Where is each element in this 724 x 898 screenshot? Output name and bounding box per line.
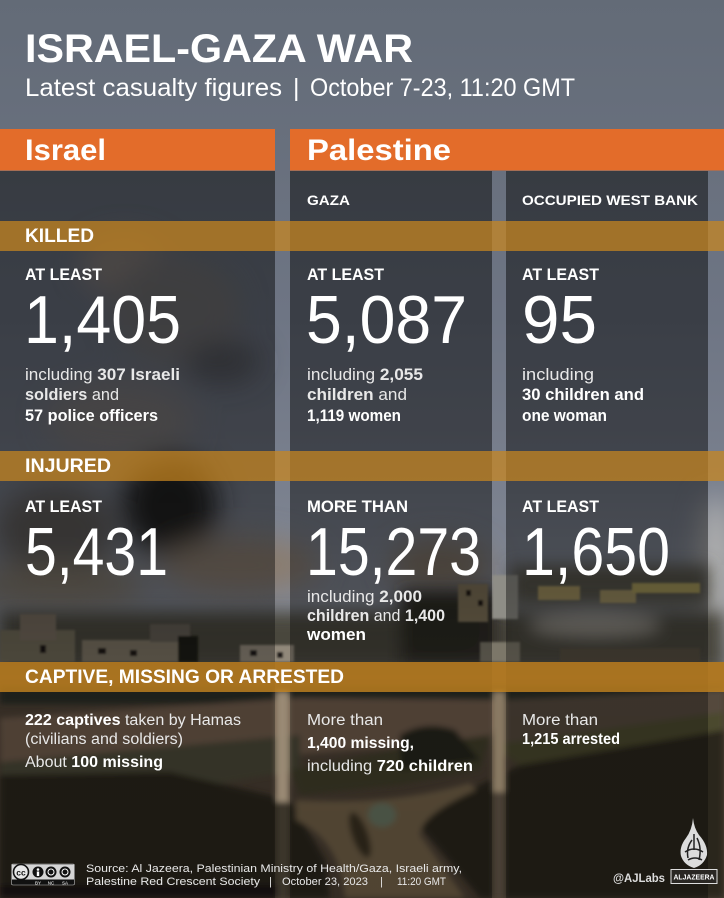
stat: Gaza injured: 15,273 [306, 514, 481, 590]
arrested: West Bank: More than [522, 712, 598, 729]
missing: Gaza: 1,400 missing, [307, 735, 414, 752]
stat: Gaza injured [306, 498, 481, 644]
icon: Creative Commons badge: BY [35, 880, 41, 886]
band: Captive, missing or arrested: CAPTIVE, MISSING OR ARRESTED [25, 667, 344, 688]
stat: Gaza injured: including 2,000 [307, 588, 422, 606]
subtitle: October 7-23, 11:20 GMT [310, 74, 575, 102]
title: ISRAEL-GAZA WAR [25, 27, 413, 71]
dark hill right [410, 730, 724, 898]
source text: 11:20 GMT [397, 876, 446, 888]
stat: Gaza injured: MORE THAN [307, 498, 408, 516]
stat: Israel killed [24, 266, 181, 425]
stat: West Bank injured: 1,650 [522, 514, 670, 590]
band: Injured [0, 451, 724, 481]
icon: Creative Commons badge: cc [16, 868, 26, 878]
missing: Gaza [307, 712, 473, 775]
subtitle: | [293, 74, 300, 102]
subtitle [25, 74, 575, 102]
icon: Creative Commons badge [12, 864, 74, 886]
band: Killed [0, 221, 724, 251]
source text: | [269, 876, 272, 888]
stat: West Bank killed: 30 children and [522, 386, 644, 404]
source text: | [380, 876, 383, 888]
logo: Al Jazeera wordmark [671, 870, 717, 884]
stat: West Bank killed: AT LEAST [522, 266, 599, 284]
missing: Gaza: More than [307, 712, 383, 729]
icon: Creative Commons badge: NC [48, 880, 55, 886]
stat: Israel killed: including 307 Israeli [25, 366, 180, 384]
stat: Israel killed: AT LEAST [25, 266, 102, 284]
stat: Israel injured: AT LEAST [25, 498, 102, 516]
credit: AJLabs: @AJLabs [613, 873, 665, 885]
band: Injured: INJURED [25, 456, 111, 477]
stat: Gaza killed [306, 266, 467, 425]
band: Killed: KILLED [25, 226, 94, 247]
header: Palestine: Palestine [307, 134, 451, 167]
stat: Israel killed: 1,405 [24, 282, 181, 358]
stat: West Bank killed: one woman [522, 407, 607, 425]
missing: Gaza: including 720 children [307, 758, 473, 775]
stat: Gaza killed: including 2,055 [307, 366, 423, 384]
arrested: West Bank [522, 712, 620, 748]
dark hill left [0, 772, 330, 898]
subheading: Gaza: GAZA [307, 192, 350, 208]
stat: West Bank killed: 95 [522, 282, 597, 358]
header: Israel: Israel [25, 134, 106, 167]
stat: Gaza injured: women [306, 626, 366, 644]
ground [0, 662, 724, 898]
band: Captive, missing or arrested [0, 662, 724, 692]
stat: Israel killed: 57 police officers [25, 407, 158, 425]
captives: Israel: (civilians and soldiers) [25, 731, 183, 748]
source text: October 23, 2023 [282, 876, 368, 888]
subtitle: Latest casualty figures [25, 74, 282, 102]
stat: Israel killed: soldiers and [25, 386, 119, 404]
source text: Palestine Red Crescent Society [86, 876, 261, 888]
icon: Creative Commons badge: SA [62, 880, 68, 886]
stat: West Bank killed: including [522, 366, 594, 384]
bright gap strips [276, 692, 289, 802]
stat: Gaza injured: children and 1,400 [307, 607, 445, 625]
captives: Israel: 222 captives taken by Hamas [25, 712, 241, 729]
dark column panels [0, 171, 708, 898]
stat: Israel injured: 5,431 [25, 514, 168, 590]
source text: Source: Al Jazeera, Palestinian Ministry of Health/Gaza, Israeli army, [86, 863, 462, 875]
subheading: Occupied West Bank: OCCUPIED WEST BANK [522, 192, 698, 208]
stat: Gaza killed: 5,087 [306, 282, 467, 358]
stat: West Bank killed [522, 266, 644, 425]
header: Israel [0, 129, 275, 170]
logo: Al Jazeera emblem [681, 818, 707, 868]
stat: Gaza killed: AT LEAST [307, 266, 384, 284]
arrested: West Bank: 1,215 arrested [522, 731, 620, 748]
logo: Al Jazeera wordmark: ALJAZEERA [674, 874, 714, 882]
captives: Israel [25, 712, 241, 771]
header: Palestine [290, 129, 724, 170]
stat: Gaza killed: children and [307, 386, 407, 404]
captives: Israel: About 100 missing [25, 754, 163, 771]
source text [86, 863, 462, 888]
stat: West Bank injured: AT LEAST [522, 498, 599, 516]
stat: Gaza killed: 1,119 women [307, 407, 401, 425]
